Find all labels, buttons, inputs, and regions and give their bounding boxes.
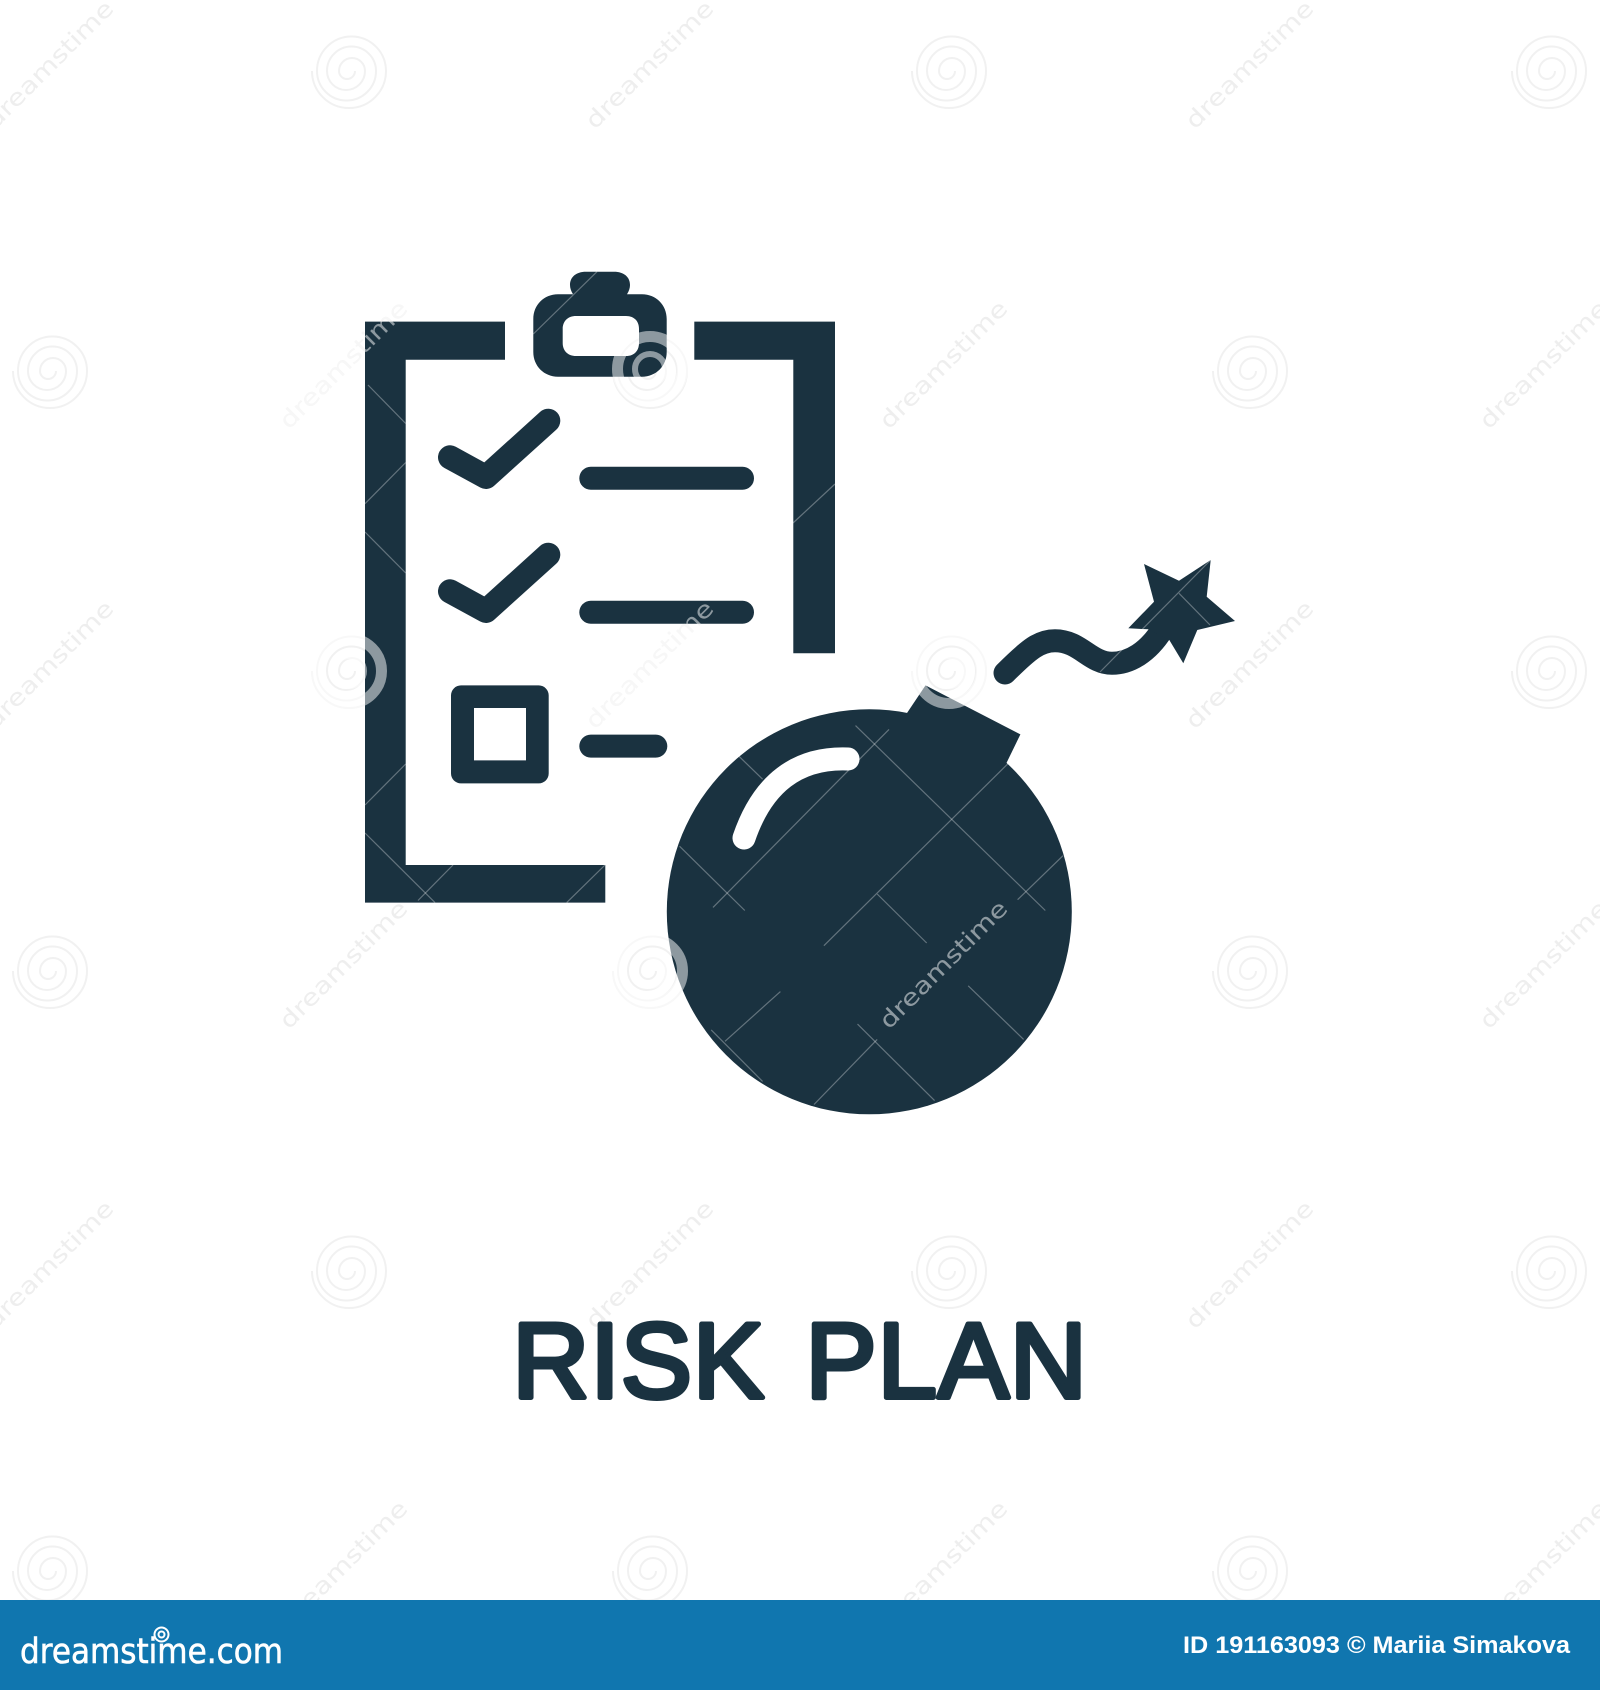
footer bar — [0, 1600, 1600, 1690]
watermark overlay on dark shapes — [275, 272, 1211, 1104]
title: RISK PLAN — [512, 1302, 1088, 1420]
watermark pattern: dreamstime — [1181, 1196, 1319, 1334]
bomb highlight — [744, 759, 848, 838]
icon: clipboard checklist — [365, 272, 835, 903]
footer logo text: dreamstime.com — [20, 1632, 283, 1672]
clipboard right frame — [694, 322, 835, 653]
footer logo spiral — [154, 1628, 168, 1642]
list line 1 — [579, 467, 754, 490]
watermark pattern: dreamstime — [275, 1496, 413, 1634]
watermark pattern: dreamstime — [1181, 596, 1319, 734]
bomb cap — [905, 685, 1020, 766]
watermark pattern: dreamstime — [581, 596, 719, 734]
watermark pattern: dreamstime — [1475, 296, 1600, 434]
list line 2 — [579, 601, 754, 624]
watermark pattern: dreamstime — [275, 896, 413, 1034]
fuse — [1005, 630, 1162, 673]
watermark overlay on dark shapes: dreamstime — [275, 296, 413, 434]
empty checkbox — [451, 685, 549, 783]
clipboard clip — [533, 272, 667, 377]
watermark pattern: dreamstime — [1181, 0, 1319, 134]
watermark overlay on dark shapes: dreamstime — [581, 596, 719, 734]
watermark pattern: dreamstime — [275, 296, 413, 434]
check mark 2 — [450, 555, 548, 611]
watermark pattern: dreamstime — [875, 296, 1013, 434]
watermark pattern: dreamstime — [581, 1196, 719, 1334]
footer image id and credit: ID 191163093 © Mariia Simakova — [1183, 1632, 1571, 1659]
bomb body — [667, 709, 1072, 1114]
watermark pattern: dreamstime — [1475, 896, 1600, 1034]
watermark pattern: dreamstime — [875, 1496, 1013, 1634]
watermark pattern: dreamstime — [1475, 1496, 1600, 1634]
spark star — [1128, 560, 1235, 663]
icon: bomb — [667, 560, 1235, 1114]
check mark 1 — [450, 421, 548, 477]
clipboard left frame — [365, 322, 605, 903]
watermark pattern: dreamstime — [581, 0, 719, 134]
list line 3 — [579, 735, 667, 758]
watermark overlay on dark shapes: dreamstime — [875, 896, 1013, 1034]
